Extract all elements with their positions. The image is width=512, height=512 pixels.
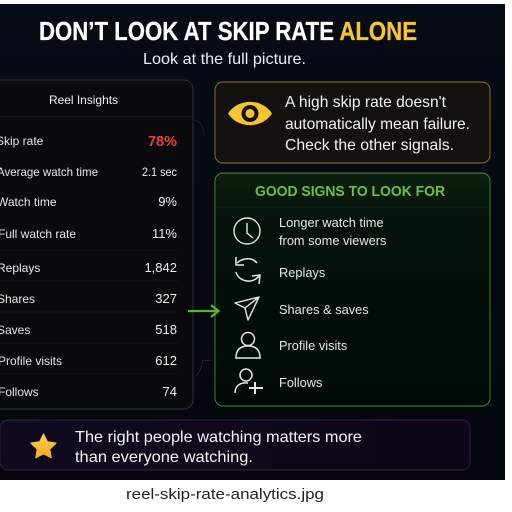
file name caption: reel-skip-rate-analytics.jpg [126,486,324,503]
row: skip rate [0,134,177,150]
row: average watch time: 2.1 sec [142,165,177,179]
row: full watch rate: Full watch rate [0,227,76,241]
row: watch time: 9% [158,194,177,209]
callout text: Check the other signals. [285,137,454,154]
item: profile visits [236,332,347,358]
panel: reel insights [0,80,193,409]
item: replays: Replays [279,265,325,280]
row: full watch rate [0,226,177,241]
icon: eye [228,102,272,125]
arrow: insights to good signs [188,305,218,317]
row: follows [0,384,177,399]
item: longer watch time [234,215,386,248]
row: profile visits: 612 [155,353,177,368]
item: shares and saves [235,297,369,320]
callout text: automatically mean failure. [285,116,470,133]
item: longer watch time: Longer watch time [279,215,384,230]
icon: person [236,332,260,358]
row: follows: 74 [163,384,177,399]
callout text [285,94,470,154]
row: replays [0,260,177,275]
row: skip rate: 78% [148,134,177,150]
connector: top squiggle [194,120,204,137]
row: saves [0,322,177,337]
takeaway text: The right people watching matters more [75,429,362,446]
panel: warning callout [215,82,490,163]
item: shares and saves: Shares & saves [279,302,369,317]
icon: paper plane [235,297,259,320]
row: replays: 1,842 [144,260,177,275]
row: average watch time [0,165,177,179]
subtitle: Look at the full picture. [143,51,306,68]
icon: person plus [235,369,263,394]
connector: bottom squiggle [195,360,212,376]
icon: replay arrows [236,257,260,284]
row: profile visits [0,353,177,368]
icon: clock [234,218,260,244]
item: follows: Follows [279,375,322,390]
row: saves: 518 [155,322,177,337]
panel: good signs [215,173,490,406]
item: profile visits: Profile visits [279,338,347,353]
panel: bottom takeaway [0,420,470,470]
callout text: A high skip rate doesn't [285,94,447,111]
item: follows [235,369,322,394]
row: average watch time: Average watch time [0,165,98,179]
row: full watch rate: 11% [152,226,177,241]
item: longer watch time: from some viewers [279,233,386,248]
row: shares: 327 [155,291,177,306]
title: DON’T LOOK AT SKIP RATE ALONE [39,18,417,46]
panel heading: Reel Insights: Reel Insights [49,93,118,107]
icon: star [31,434,56,458]
row: watch time [0,194,177,209]
heading: good signs: GOOD SIGNS TO LOOK FOR [255,183,445,200]
takeaway text [75,429,362,466]
takeaway text: than everyone watching. [75,449,253,466]
item: replays [236,257,325,284]
row: shares [0,291,177,306]
